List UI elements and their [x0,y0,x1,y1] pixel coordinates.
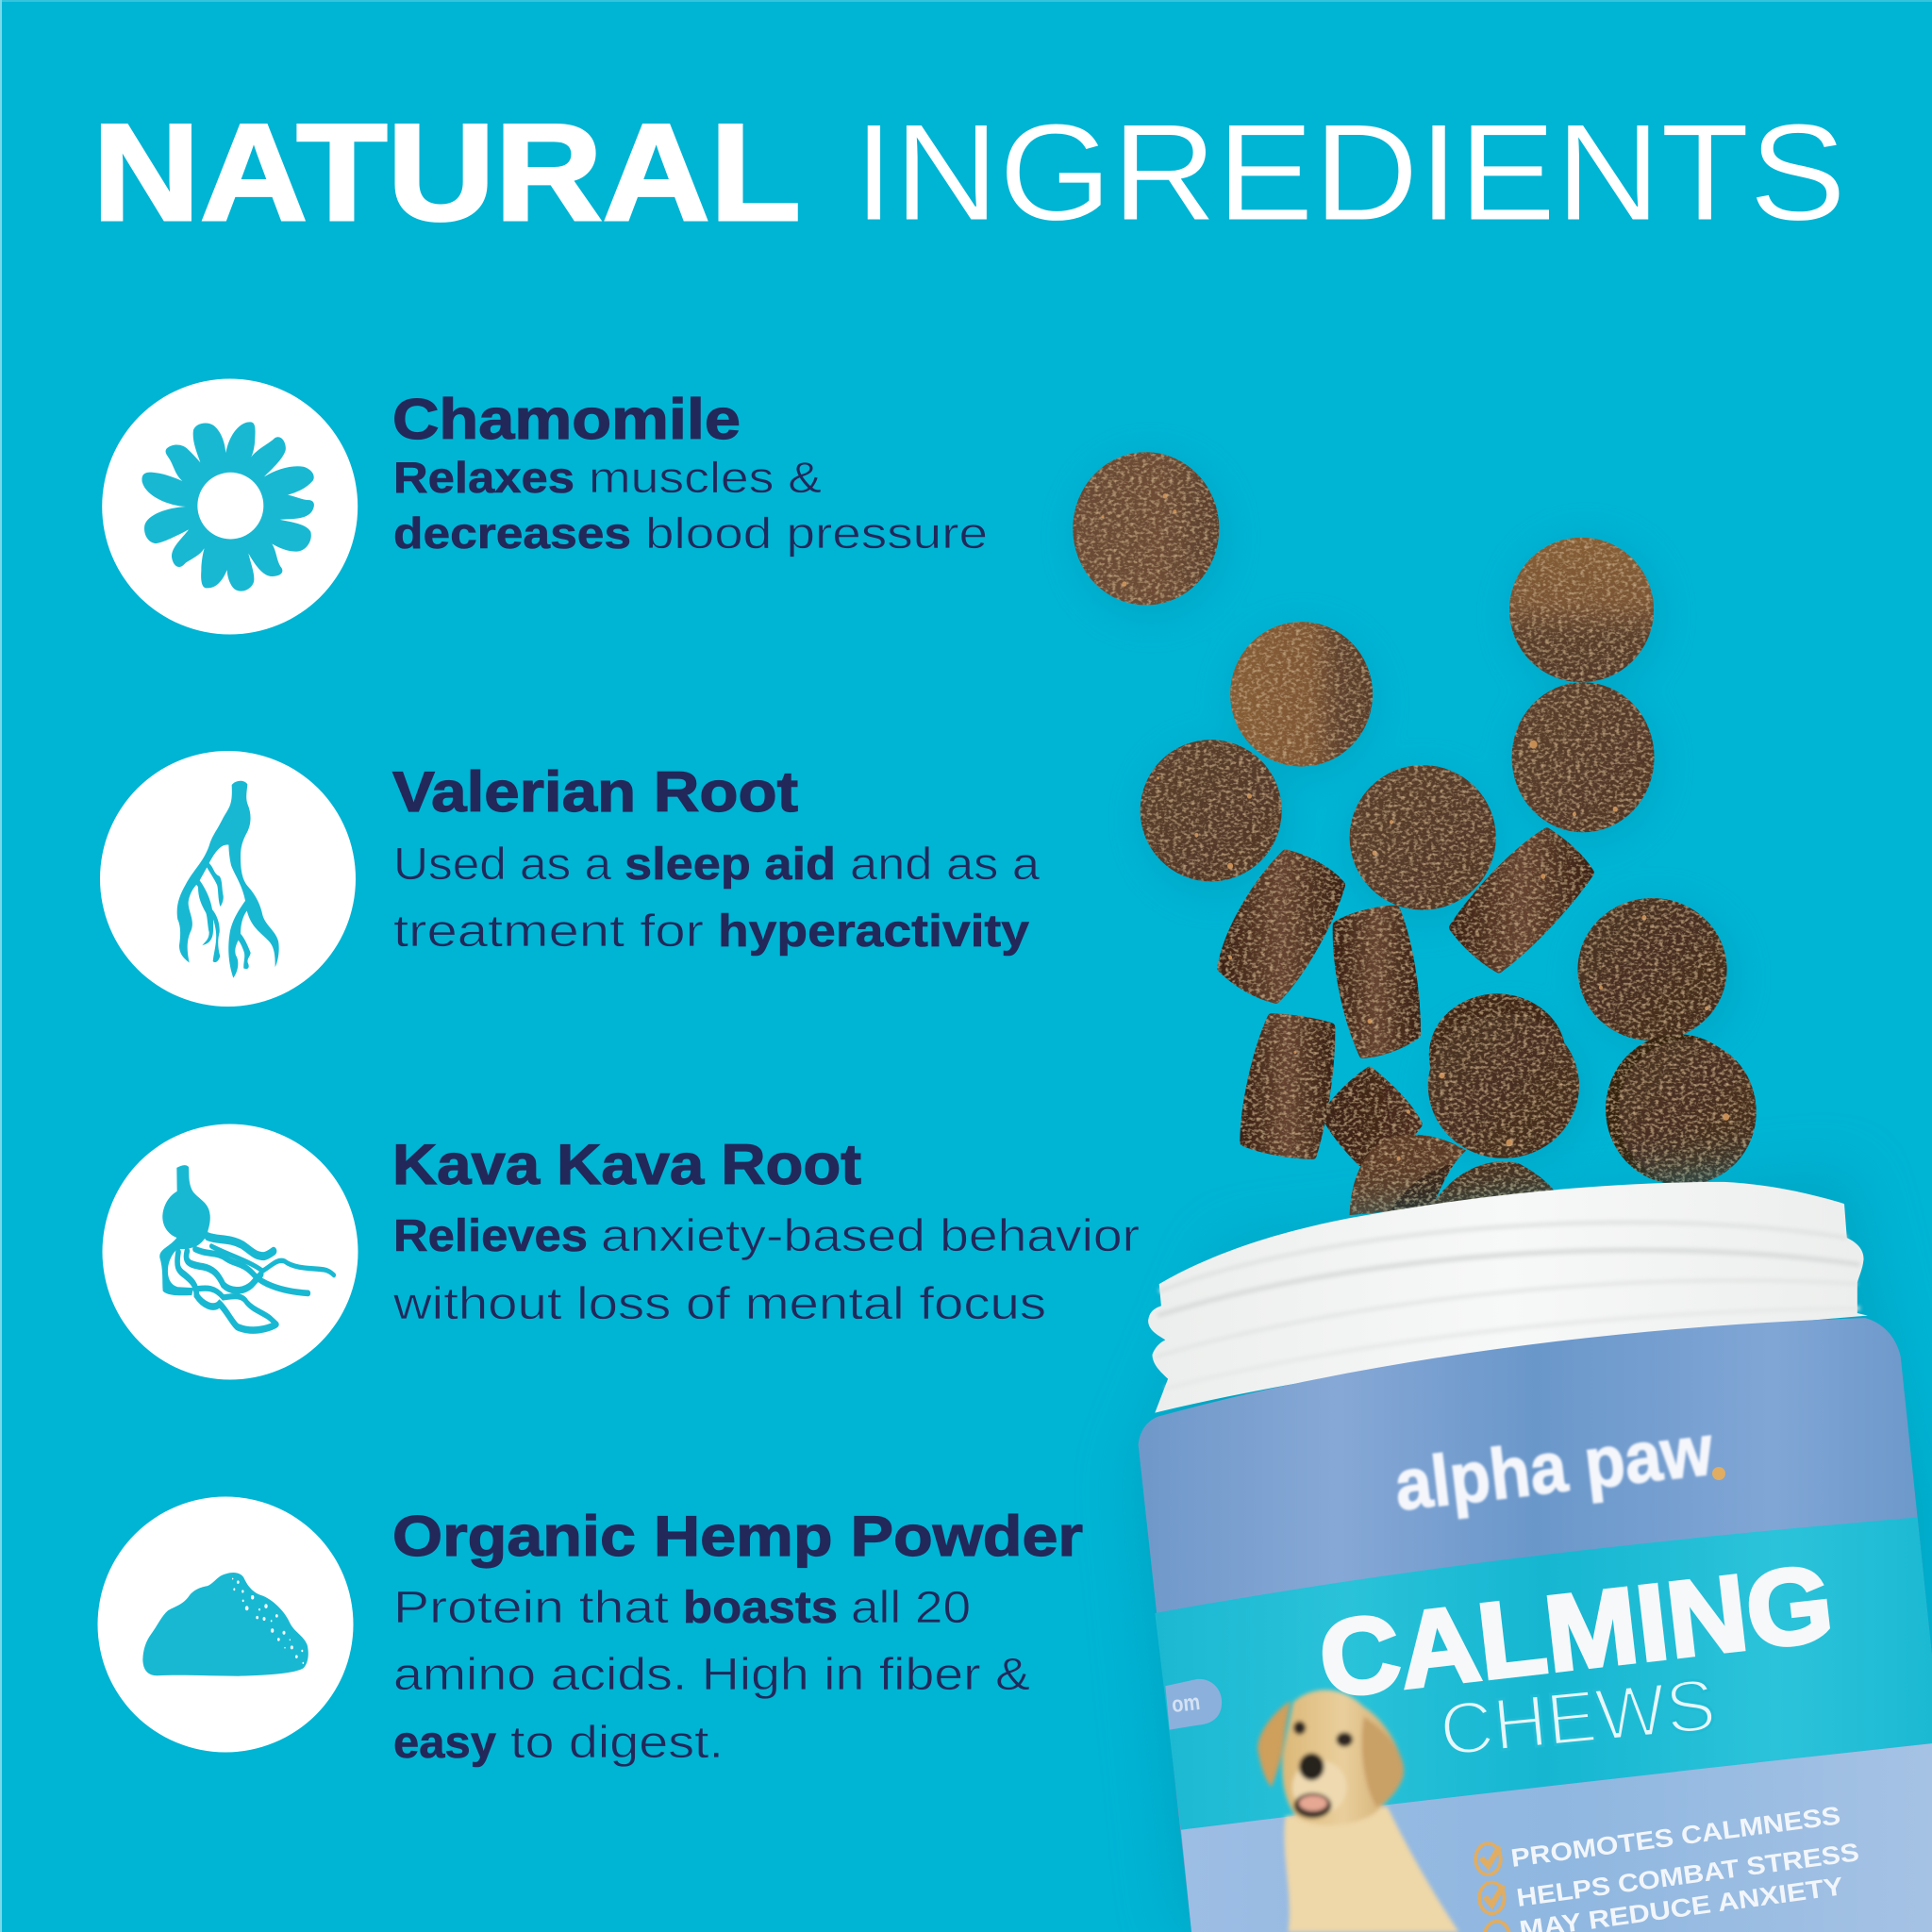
url pill [1165,1679,1222,1730]
chew: side view left [1222,854,1341,999]
chew: round top-left [1073,452,1219,606]
chews spilling from jar [1072,452,1757,1215]
text: valerian root: Valerian Root [392,760,798,824]
text: valerian root: Used as a [393,840,611,890]
jar text: benefits list: PROMOTES CALMNESS [1509,1801,1842,1873]
text: valerian root: and as a [850,840,1040,890]
chew: stacked pair centre [1428,993,1579,1158]
text: valerian root: hyperactivity [718,907,1029,957]
jar text: chews: CHEWS [1436,1662,1719,1772]
text: kava kava root: anxiety-based behavior [601,1211,1140,1261]
text: chamomile: Relaxes [393,453,575,502]
chew: at jar mouth right [1432,1161,1555,1210]
text: chamomile [392,388,988,558]
jar text: calming: CALMING [1313,1543,1839,1721]
title: NATURAL [92,95,801,249]
chew: side view centre [1337,910,1417,1054]
text: organic hemp powder: Organic Hemp Powder [392,1505,1083,1568]
text: organic hemp powder: Protein that [393,1583,669,1633]
icon: chamomile flower [102,379,358,634]
chew: side view bottom [1325,1072,1418,1161]
text: organic hemp powder: boasts [683,1583,838,1633]
text: organic hemp powder [392,1505,1083,1768]
text: valerian root: treatment for [393,907,704,957]
chew: side view lower left [1244,1018,1331,1155]
text: kava kava root: Kava Kava Root [392,1133,861,1196]
chew: side view right [1454,832,1590,969]
jar text: benefits list [1509,1801,1861,1932]
icon: valerian root [100,751,356,1007]
jar text: benefits list: HELPS COMBAT STRESS [1515,1838,1861,1912]
text: valerian root: sleep aid [625,840,836,890]
text: chamomile: Chamomile [392,388,741,451]
jar neck with threads [1148,1182,1868,1413]
chew: round lower right [1577,898,1727,1041]
text: chamomile: blood pressure [645,508,988,558]
dog photo [1257,1690,1458,1932]
text: kava kava root: Relieves [393,1211,588,1261]
chew: round centre [1350,765,1496,910]
jar text: alpha paw: alpha paw [1391,1410,1718,1526]
icon: hemp powder mound [98,1496,353,1753]
text: kava kava root: without loss of mental focus [392,1279,1046,1329]
text: organic hemp powder: all 20 [851,1583,971,1633]
title [92,95,1846,249]
jar label lower panel [1181,1743,1932,1932]
text: chamomile: muscles & [589,453,822,502]
jar label teal band [1155,1517,1932,1830]
chew: at jar mouth left [1350,1135,1466,1215]
text: organic hemp powder: amino acids. High in fiber & [393,1650,1030,1700]
chew: round upper centre [1230,622,1373,767]
title: INGREDIENTS [854,95,1846,249]
text: organic hemp powder: to digest. [510,1718,724,1768]
text: kava kava root [392,1133,1140,1329]
chew: round right [1512,682,1655,832]
text: chamomile: decreases [393,508,631,558]
chew: round left [1141,740,1282,881]
text: valerian root [392,760,1040,957]
check icons [1475,1843,1509,1932]
chew: round upper right [1509,538,1654,682]
jar label upper [1139,1318,1932,1932]
product jar [1132,1170,1932,1932]
text: organic hemp powder: easy [393,1718,496,1768]
chew: round far right [1606,1034,1757,1184]
icon: kava kava root [102,1124,358,1379]
jar text: url fragment: om [1171,1690,1201,1718]
